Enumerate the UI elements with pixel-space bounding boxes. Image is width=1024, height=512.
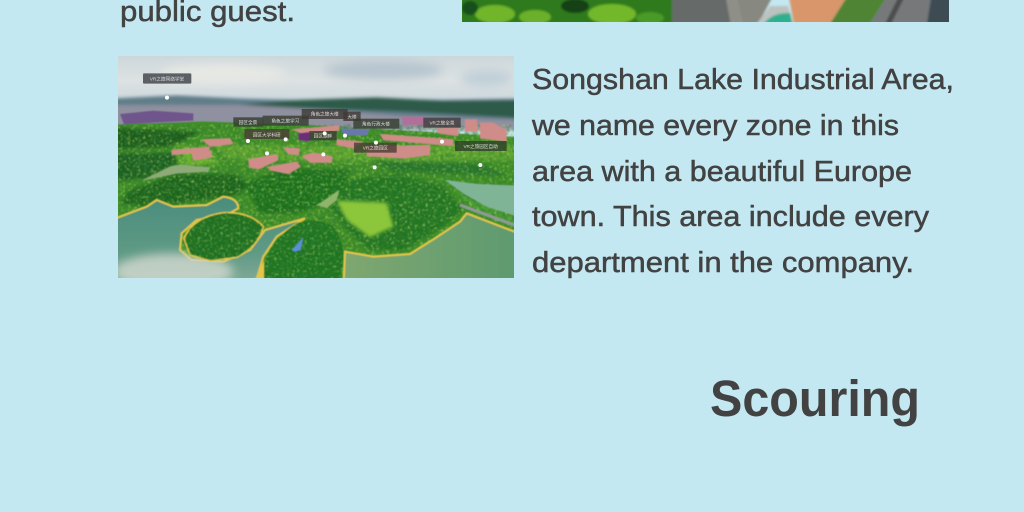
- photo: aerial strip of trees and road (top right): [462, 0, 949, 22]
- campus buildings: [172, 117, 507, 174]
- distant mountains and city: [110, 95, 523, 130]
- text: Songshan Lake description: [531, 64, 954, 279]
- map labels: VR之旅全景: [429, 119, 455, 126]
- map labels: 角色之旅学习: [271, 118, 300, 125]
- map labels: VR之旅网络学堂: [150, 76, 185, 83]
- lake left: [118, 194, 306, 278]
- map markers: [165, 96, 482, 169]
- map labels: 园区大学科研: [253, 132, 281, 139]
- small pond and upper-right lake: [142, 165, 210, 181]
- map labels: 角色行政大楼: [362, 121, 390, 128]
- hilltop clearing: [337, 201, 393, 237]
- text: Songshan Lake description: department in the company.: [532, 247, 914, 279]
- map labels: 园区全景: [239, 119, 258, 126]
- map labels: 园区湖畔: [314, 133, 333, 140]
- map labels: 角色之旅大楼: [311, 111, 339, 118]
- lake reflections: [118, 246, 238, 278]
- text: Songshan Lake description: Songshan Lake Industrial Area,: [532, 64, 954, 96]
- text: Songshan Lake description: area with a beautiful Europe: [532, 156, 912, 188]
- sky: [118, 56, 514, 101]
- map labels: VR之旅园区: [363, 145, 388, 152]
- island canopy texture: [184, 212, 343, 278]
- wooded islands: [184, 213, 263, 261]
- ground greenery: [118, 120, 514, 278]
- causeway road: [460, 205, 523, 228]
- lake right: [342, 212, 514, 278]
- text: Songshan Lake description: we name every zone in this: [531, 110, 899, 142]
- tree canopy texture: [118, 124, 514, 278]
- text: Songshan Lake description: town. This area include every: [532, 201, 930, 233]
- map labels: [143, 73, 507, 153]
- map labels: VR之旅园区自助: [463, 143, 498, 150]
- photo: aerial panorama of Songshan Lake: [118, 56, 514, 278]
- map labels: 大楼: [347, 114, 357, 121]
- heading: Scouring: Scouring: [710, 370, 920, 427]
- distant tower blocks: [120, 111, 193, 125]
